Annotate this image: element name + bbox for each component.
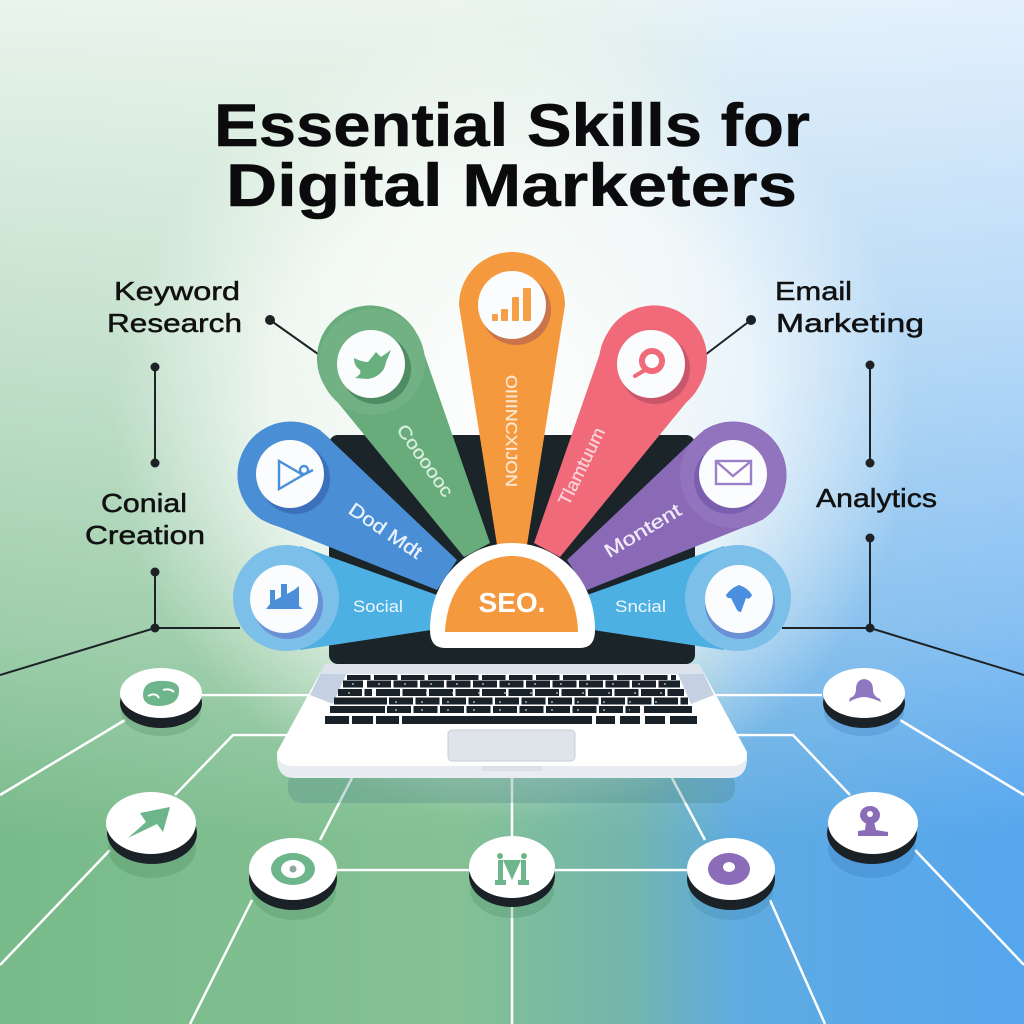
petal: orange: OIIIINCXIJON [502, 375, 519, 487]
node: target [249, 838, 337, 920]
trackpad [448, 730, 575, 761]
label: analytics: Analytics [816, 483, 937, 513]
label: keyword research: Keyword [114, 276, 240, 306]
petal: light blue left: Social [353, 597, 403, 616]
title: Digital Marketers [226, 152, 797, 219]
laptop screen [329, 435, 695, 664]
laptop shadow [288, 770, 735, 803]
label: keyword research [107, 276, 242, 338]
petal: purple [567, 421, 787, 590]
petal: red: Tlamtuum [554, 424, 609, 509]
laptop base [277, 664, 747, 778]
node: arrow [106, 792, 197, 878]
title: Essential Skills for [214, 92, 810, 159]
petal: green: Coooooc [393, 420, 457, 501]
label: email marketing: Marketing [776, 308, 924, 338]
petal: light blue right [587, 545, 791, 651]
dark leader lines [0, 315, 1024, 675]
label: conial creation: Conial [101, 488, 187, 518]
title [214, 92, 810, 219]
SEO dome: SEO. [479, 587, 545, 618]
petal: light blue left [233, 545, 437, 651]
label: keyword research: Research [107, 308, 242, 338]
petal: light blue right: Sncial [615, 597, 666, 616]
skill fan [233, 252, 791, 651]
SEO dome [430, 543, 595, 648]
label: conial creation [85, 488, 205, 550]
laptop notch [482, 766, 542, 771]
petal: blue [237, 421, 457, 590]
petal: orange [459, 252, 565, 545]
node: disc [687, 838, 775, 920]
node: pin [827, 792, 918, 878]
label: conial creation: Creation [85, 520, 205, 550]
keyboard [325, 678, 697, 720]
petal: purple: Montent [601, 500, 686, 562]
label: email marketing: Email [775, 276, 852, 306]
node: top right [823, 668, 905, 736]
petal: red [534, 305, 707, 557]
label: email marketing [775, 276, 924, 338]
petal: green [317, 305, 490, 557]
laptop [277, 435, 747, 778]
floor connector lines [0, 694, 1024, 1024]
petal: blue: Dod Mdt [344, 499, 426, 564]
node: mail M [469, 836, 555, 918]
node: top left [120, 668, 202, 736]
